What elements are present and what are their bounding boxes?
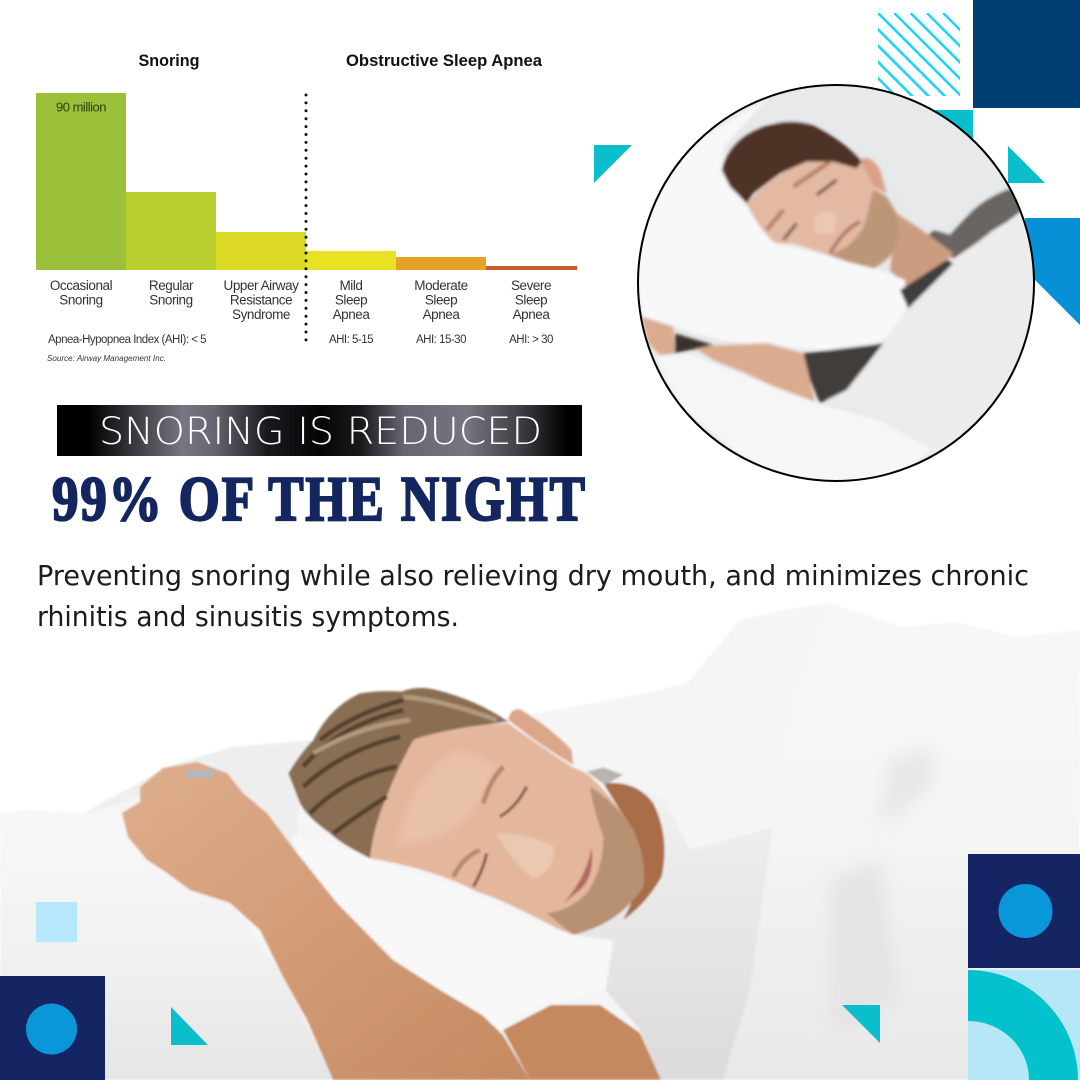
left pillow	[0, 810, 333, 1080]
category labels: Severe	[511, 278, 551, 293]
duvet on right	[824, 212, 1020, 402]
brows	[767, 162, 830, 230]
banner: snoring is reduced	[57, 405, 582, 456]
AHI labels: Apnea-Hypopnea Index (AHI): < 5	[48, 334, 206, 346]
AHI labels	[48, 334, 553, 346]
bar chart: snoring to sleep apnea	[36, 51, 577, 363]
blue shape right edge	[1025, 218, 1080, 325]
neck	[603, 783, 664, 920]
headline: 99% of the night: 99% OF THE NIGHT	[52, 464, 585, 534]
chart heading: obstructive sleep apnea: Obstructive Sleep Apnea	[346, 51, 543, 70]
hand	[642, 317, 675, 355]
hair	[288, 688, 508, 858]
body text: rhinitis and sinusitis symptoms.	[37, 601, 459, 633]
dark shirt	[900, 260, 953, 308]
category labels: Sleep	[335, 292, 367, 308]
beard	[547, 787, 644, 935]
category labels: Sleep	[425, 292, 457, 308]
hair	[722, 122, 862, 203]
dotted divider	[304, 95, 308, 345]
pillow under head	[290, 835, 613, 1035]
mouth	[563, 847, 592, 903]
category labels: Syndrome	[232, 307, 290, 322]
grey shirt at shoulder	[927, 188, 1027, 258]
bars	[36, 93, 577, 270]
collar	[587, 767, 623, 785]
left pillow	[637, 100, 907, 350]
navy square top right	[973, 0, 1080, 108]
category labels: Apnea	[423, 307, 460, 322]
forearm and hand	[122, 762, 530, 1080]
light blue square	[36, 902, 77, 942]
bottom-right arch tile	[968, 970, 1080, 1080]
forehead highlight	[397, 750, 497, 844]
hair streaks	[303, 700, 403, 833]
head: hair face ear beard	[288, 688, 664, 935]
forearm	[693, 343, 815, 402]
category labels: Upper Airway	[224, 278, 299, 293]
category labels: Resistance	[230, 292, 292, 308]
beard	[830, 190, 900, 268]
ear	[860, 158, 887, 193]
face	[746, 159, 884, 257]
bar value label: 90 million	[56, 100, 106, 114]
category labels: Mild	[340, 278, 362, 293]
body text: Preventing snoring while also relieving dry mouth, and minimizes chronic	[37, 560, 1029, 592]
teal triangle right of circle	[1008, 146, 1045, 183]
bottom photo: man sleeping under white duvet	[0, 603, 1080, 1080]
bottom-right navy tile with blue circle	[968, 854, 1080, 968]
brows	[453, 767, 503, 877]
ring	[185, 769, 214, 779]
duvet fold shadows	[880, 750, 935, 830]
mouth	[830, 222, 860, 253]
decorative stripes square	[878, 13, 960, 96]
body text	[37, 560, 1029, 633]
bedding silhouette	[0, 603, 1080, 1080]
category labels: Apnea	[333, 307, 370, 322]
category labels	[50, 278, 551, 322]
AHI labels: AHI: 15-30	[416, 334, 466, 346]
category labels: Regular	[149, 278, 194, 293]
chart heading: snoring: Snoring	[138, 51, 200, 70]
face	[370, 723, 644, 935]
chest in white shirt	[572, 780, 773, 1080]
eyes	[783, 180, 837, 240]
duvet	[723, 603, 1080, 1080]
lower duvet	[655, 353, 933, 487]
nose	[497, 833, 554, 878]
teal triangle behind circle	[935, 110, 973, 148]
category labels: Apnea	[513, 307, 550, 322]
category labels: Snoring	[59, 292, 103, 308]
ear	[508, 709, 573, 765]
upper arm	[503, 1005, 661, 1080]
source note: Source: Airway Management Inc.	[47, 354, 166, 363]
eyes	[473, 787, 527, 887]
AHI labels: AHI: 5-15	[329, 334, 373, 346]
teal triangle bottom left	[171, 1007, 208, 1045]
bottom-left navy tile with blue circle	[0, 976, 105, 1080]
teal triangle bottom right	[842, 1005, 880, 1043]
category labels: Sleep	[515, 292, 547, 308]
category labels: Snoring	[149, 292, 193, 308]
neck	[890, 213, 953, 288]
nose	[813, 211, 837, 233]
banner: snoring is reduced: SNORING IS REDUCED	[99, 410, 542, 453]
AHI labels: AHI: > 30	[509, 334, 553, 346]
headboard pillow	[764, 119, 1010, 234]
teal triangle left of circle	[594, 145, 632, 183]
circular photo: man sleeping on pillow	[637, 85, 1040, 487]
category labels: Moderate	[414, 278, 468, 293]
category labels: Occasional	[50, 278, 113, 293]
back pillow shade	[85, 740, 313, 850]
